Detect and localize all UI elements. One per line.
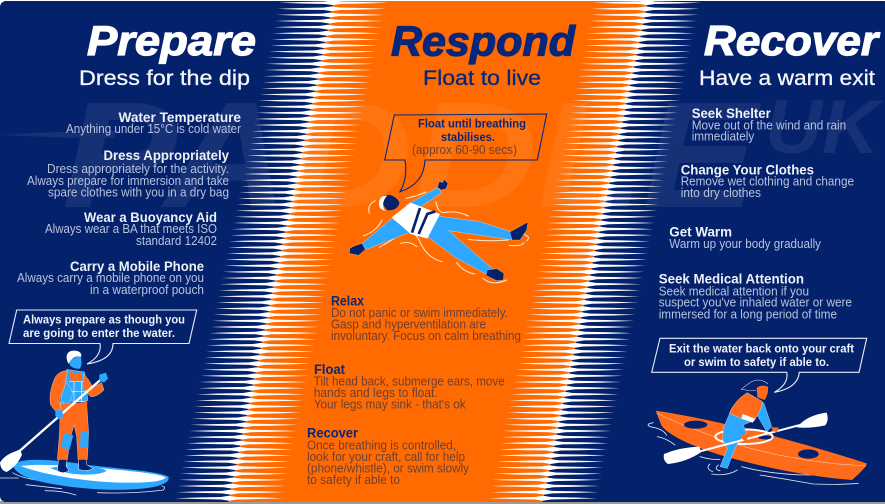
text block: mobile phone: Carry a Mobile Phone xyxy=(70,259,204,274)
text block: mobile phone: in a waterproof pouch xyxy=(90,283,204,297)
icon: floating person xyxy=(349,179,528,283)
left arm xyxy=(50,371,67,411)
text block: seek medical attention xyxy=(659,271,852,321)
text block: recover steps: look for your craft, call for help xyxy=(307,450,465,464)
text block: buoyancy aid xyxy=(45,210,217,248)
torso and vest xyxy=(60,369,88,403)
text block: seek medical attention: suspect you've inhaled water or were xyxy=(659,296,852,310)
text block: seek shelter xyxy=(692,106,846,144)
panel: prepare xyxy=(0,17,256,495)
text block: buoyancy aid: standard 12402 xyxy=(136,234,217,248)
arm xyxy=(755,398,772,432)
text block: seek medical attention: Seek medical attention if you xyxy=(659,284,809,298)
text block: seek shelter: Move out of the wind and rain xyxy=(692,118,846,132)
kayak hull xyxy=(656,411,867,480)
striped transition bands xyxy=(175,0,701,501)
subheading: Have a warm exit: Have a warm exit xyxy=(699,67,875,90)
text block: float: Float xyxy=(314,362,345,377)
text block: get warm: Warm up your body gradually xyxy=(669,237,822,251)
right arm xyxy=(83,374,104,397)
callout: always prepare: Always prepare as though you xyxy=(23,312,185,326)
text block: dress appropriately: Always prepare for immersion and take xyxy=(27,174,229,188)
text block: recover steps: Recover xyxy=(307,425,359,440)
text block: buoyancy aid: Wear a Buoyancy Aid xyxy=(84,210,217,225)
watermark logo: UK xyxy=(765,85,884,170)
arms xyxy=(362,188,442,249)
paddle xyxy=(0,377,103,472)
text block: relax: Relax xyxy=(331,293,364,308)
text block: seek medical attention: Seek Medical Attention xyxy=(659,271,804,286)
life vest xyxy=(392,203,440,239)
icon: kayaker xyxy=(648,380,867,484)
text block: mobile phone xyxy=(17,259,204,297)
board xyxy=(13,460,169,490)
text block: relax: Gasp and hyperventilation are xyxy=(331,317,486,331)
heading: Respond: Respond xyxy=(391,18,576,64)
body and legs xyxy=(720,408,758,468)
text block: mobile phone: Always carry a mobile phone on you xyxy=(17,271,204,285)
text block: dress appropriately: spare clothes with you in a dry bag xyxy=(48,186,229,200)
text block: recover steps: to safety if able to xyxy=(307,473,400,487)
panel: recover xyxy=(648,17,881,484)
text block: recover steps xyxy=(307,425,470,487)
text block: relax xyxy=(331,293,521,343)
head xyxy=(379,195,399,211)
panel: respond xyxy=(307,18,576,487)
callout: exit the water xyxy=(652,338,867,392)
text block: float: hands and legs to float. xyxy=(314,386,438,400)
text block: seek shelter: immediately xyxy=(692,130,755,144)
icon: paddleboarder xyxy=(0,351,169,495)
legs xyxy=(57,403,89,459)
callout: always prepare: are going to enter the water. xyxy=(23,326,175,340)
text block: water temperature: Anything under 15°C is cold water xyxy=(66,122,241,136)
text block: recover steps: (phone/whistle), or swim slowly xyxy=(307,462,470,476)
text block: relax: Do not panic or swim immediately. xyxy=(331,306,508,320)
head xyxy=(67,351,82,369)
callout: float until breathing stabilises xyxy=(385,114,547,192)
text block: water temperature xyxy=(66,110,241,136)
text block: dress appropriately xyxy=(27,148,229,200)
callout: float until breathing stabilises: Float until breathing xyxy=(418,117,526,131)
text block: change your clothes: Remove wet clothing and change xyxy=(681,175,854,189)
text block: float: Your legs may sink - that's ok xyxy=(314,398,466,412)
subheading: Dress for the dip: Dress for the dip xyxy=(79,67,250,90)
callout: exit the water: Exit the water back onto your craft xyxy=(669,341,854,355)
text block: water temperature: Water Temperature xyxy=(118,110,241,125)
text block: get warm: Get Warm xyxy=(669,225,732,240)
callout: exit the water: or swim to safety if able to. xyxy=(684,355,829,369)
life vest xyxy=(729,393,763,422)
callout: float until breathing stabilises: stabilises. xyxy=(441,130,495,144)
text block: seek medical attention: immersed for a long period of time xyxy=(659,307,837,321)
text block: dress appropriately: Dress Appropriately xyxy=(104,148,229,163)
text block: relax: involuntary. Focus on calm breathing xyxy=(331,329,521,343)
water ripples xyxy=(363,192,528,283)
subheading: Float to live: Float to live xyxy=(423,67,541,90)
head and hair xyxy=(741,380,768,400)
text block: change your clothes xyxy=(681,162,854,200)
page frame edge xyxy=(0,501,885,504)
boots xyxy=(57,458,93,473)
text block: change your clothes: into dry clothes xyxy=(681,186,761,200)
callout: always prepare xyxy=(9,310,197,364)
text block: recover steps: Once breathing is controlled, xyxy=(307,439,456,453)
legs xyxy=(428,215,512,274)
heading: Recover: Recover xyxy=(704,17,881,64)
heading: Prepare: Prepare xyxy=(87,17,256,64)
text block: float: Tilt head back, submerge ears, move xyxy=(314,375,505,389)
text block: dress appropriately: Dress appropriately for the activity. xyxy=(47,162,229,176)
hands xyxy=(741,427,779,442)
text block: buoyancy aid: Always wear a BA that meets ISO xyxy=(45,222,217,236)
text block: get warm xyxy=(669,225,822,251)
text block: seek shelter: Seek Shelter xyxy=(692,106,771,121)
watermark logo: PADDLE xyxy=(62,70,762,239)
hands and feet xyxy=(349,179,528,281)
text block: float xyxy=(314,362,505,412)
paddle xyxy=(664,413,828,464)
text block: change your clothes: Change Your Clothes xyxy=(681,162,814,177)
callout: float until breathing stabilises: (approx 60-90 secs) xyxy=(412,143,517,157)
hands xyxy=(55,373,108,419)
water ripples xyxy=(0,473,165,495)
water ripples xyxy=(648,423,858,484)
watermark logo xyxy=(4,100,884,207)
